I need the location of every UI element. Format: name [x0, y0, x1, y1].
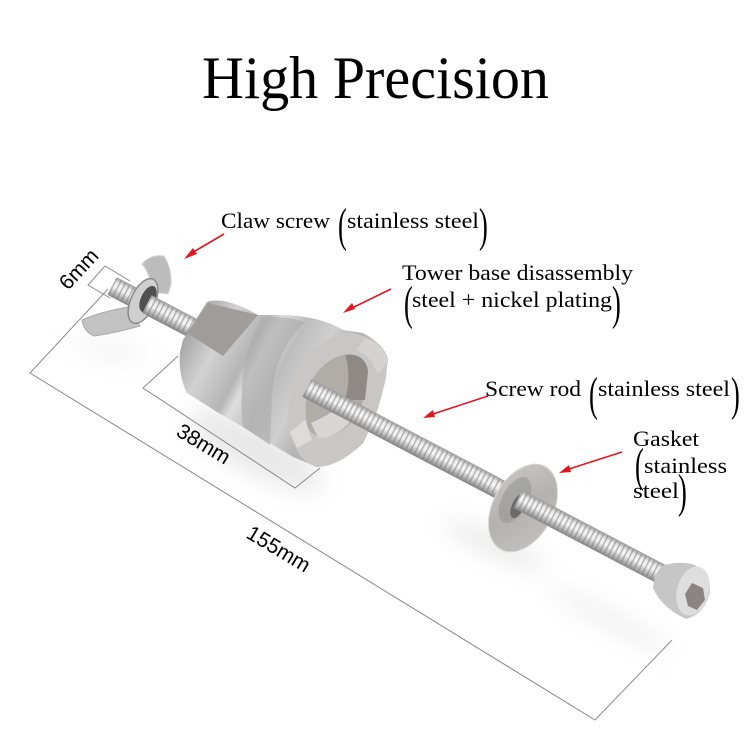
- hex flat: [187, 303, 258, 356]
- label: tower base: ): [612, 277, 621, 330]
- label: tower base: (: [404, 277, 413, 330]
- dimension: 6mm: [88, 266, 130, 298]
- dimension label: 6mm: 6mm: [55, 245, 103, 294]
- end face: [288, 333, 387, 467]
- label: gasket: stainless: [644, 453, 727, 478]
- nut collar: [122, 274, 164, 328]
- upper wing: [142, 256, 171, 294]
- label: screw rod: ): [731, 368, 740, 421]
- rod exiting tower: [302, 379, 498, 494]
- label: gasket: steel: [633, 478, 679, 503]
- label: gasket: [633, 426, 727, 518]
- rod near head: [513, 490, 669, 585]
- claw bottom: [290, 420, 312, 448]
- arrow: tower base: [343, 289, 391, 313]
- claw top: [357, 338, 388, 374]
- label: claw screw: stainless steel: [347, 208, 479, 233]
- label: screw rod: (: [589, 368, 598, 421]
- socket head: [653, 563, 715, 619]
- label: claw screw: ): [479, 199, 488, 252]
- bore highlight: [311, 402, 355, 438]
- label: gasket: (: [635, 439, 644, 492]
- dimension label: 155mm: 155mm: [242, 522, 314, 577]
- label: claw screw: [221, 199, 488, 252]
- label: tower base: Tower base disassembly: [402, 260, 633, 285]
- wing nut: [82, 256, 171, 336]
- tower body: [180, 301, 388, 467]
- label: tower base: steel + nickel plating: [412, 287, 612, 312]
- hex socket: [685, 583, 705, 610]
- gasket: [474, 452, 572, 564]
- rod segment in front of nut: [142, 295, 196, 336]
- label: tower base: [402, 260, 633, 330]
- screw rod: [107, 277, 670, 585]
- label: gasket: Gasket: [633, 426, 699, 451]
- lower wing: [82, 307, 140, 336]
- label: screw rod: [485, 368, 740, 421]
- title: High Precision: [202, 45, 549, 111]
- dimension: 155mm: [30, 289, 672, 720]
- arrow: gasket: [559, 452, 622, 473]
- cast shadows: [69, 334, 675, 657]
- bore: [306, 355, 368, 437]
- dimension lines: [30, 266, 672, 720]
- label: gasket: ): [678, 465, 687, 518]
- tower base: [180, 301, 388, 467]
- label: screw rod: Screw rod: [485, 376, 581, 401]
- bore notch: [345, 355, 368, 400]
- arrow: claw screw: [184, 234, 224, 259]
- dimension: 38mm: [143, 356, 320, 488]
- label: claw screw: Claw screw: [221, 208, 330, 233]
- knurled band: [242, 317, 305, 445]
- label: claw screw: (: [338, 199, 347, 252]
- dimension label: 38mm: 38mm: [172, 420, 234, 469]
- label: screw rod: stainless steel: [598, 376, 730, 401]
- arrow: screw rod: [423, 396, 488, 418]
- callout arrows: [184, 234, 622, 473]
